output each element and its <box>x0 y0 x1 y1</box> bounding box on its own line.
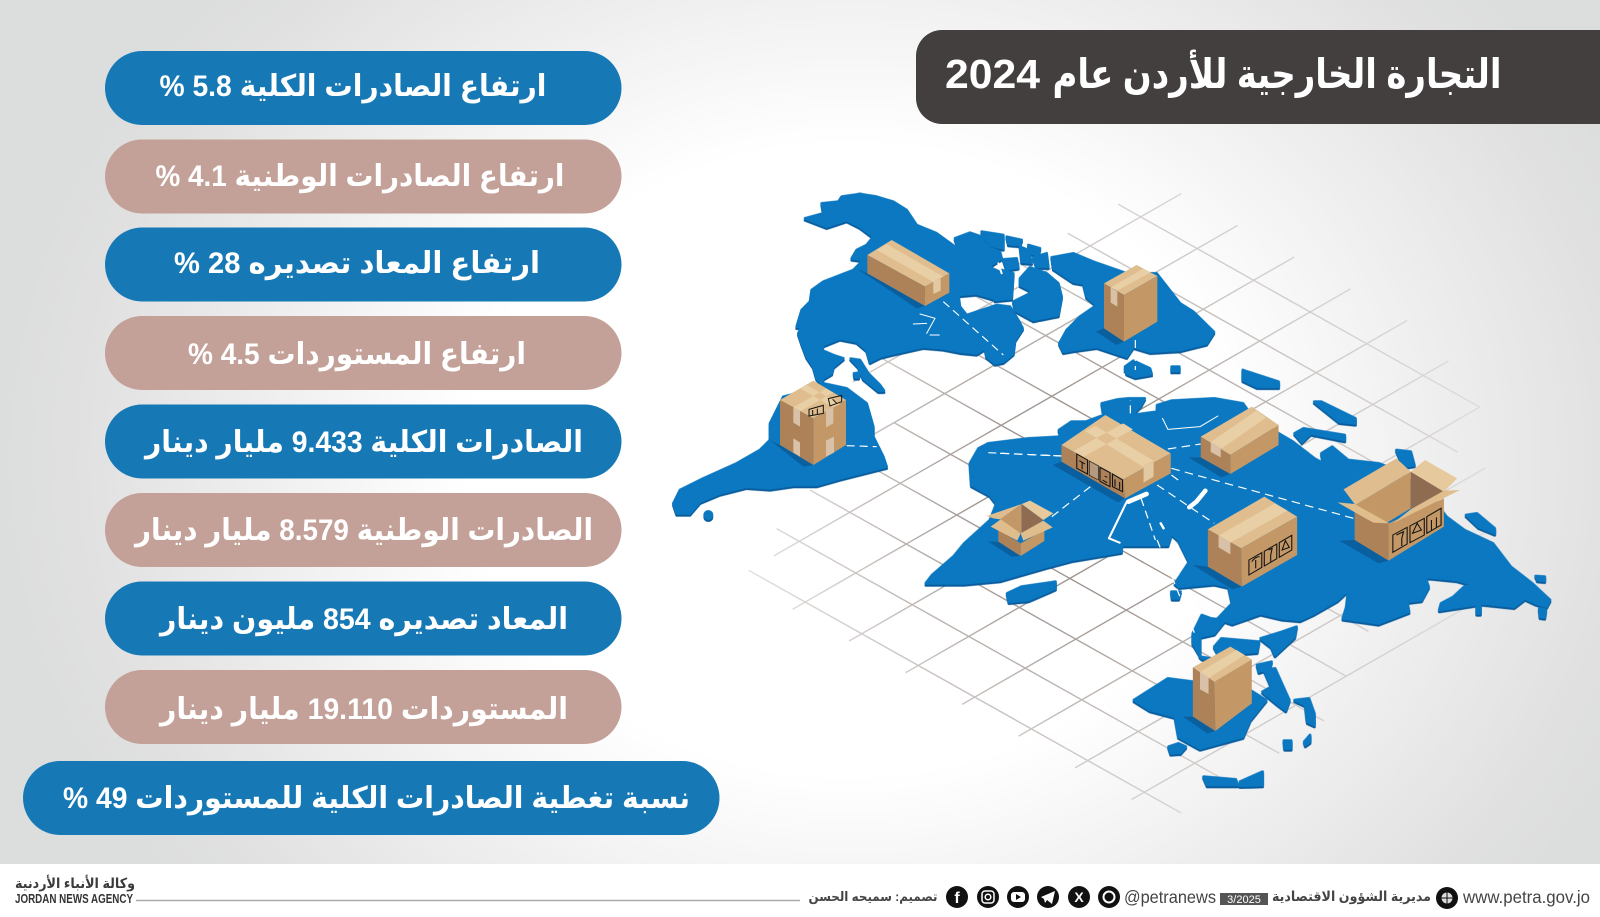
icon: globe <box>1436 887 1458 909</box>
icon: youtube <box>1007 886 1029 908</box>
title banner <box>916 30 1600 124</box>
pill: national exports rise <box>105 140 622 214</box>
pill: re-exports value <box>105 582 622 656</box>
pill: imports rise: ارتفاع المستوردات 4.5 % <box>188 338 526 371</box>
box: open carton east <box>1337 458 1460 563</box>
footer <box>0 864 1600 917</box>
pill: national exports value <box>105 493 622 567</box>
icon: telegram <box>1037 886 1059 908</box>
icon: x <box>1068 886 1090 908</box>
islet <box>705 511 712 519</box>
gulf and sea gaps <box>1109 416 1218 543</box>
pill: re-exports rise <box>105 228 622 302</box>
pill: imports rise <box>105 316 622 390</box>
icon: whatsapp <box>1098 886 1120 908</box>
box: north asia <box>1189 407 1279 477</box>
islands: caribbean <box>851 359 884 391</box>
icon: instagram <box>977 886 999 908</box>
pill: re-exports rise: ارتفاع المعاد تصديره 28 % <box>174 247 540 280</box>
social handle: @petranews <box>1124 887 1216 907</box>
arctic islands <box>955 232 1062 320</box>
map: western continents <box>673 194 1214 519</box>
box: small open carton <box>987 501 1053 557</box>
title banner: 2024 <box>945 51 1040 97</box>
isometric floor grid <box>749 194 1498 813</box>
landmass: northeast continent <box>1052 253 1214 357</box>
pill: imports value: المستوردات 19.110 مليار دينار <box>158 693 568 726</box>
continent: south america <box>673 383 887 513</box>
icon: x: X <box>1074 889 1084 905</box>
box: north america <box>857 240 949 308</box>
agency logo: JORDAN NEWS AGENCY <box>15 892 134 906</box>
box: northeast continent <box>1096 265 1157 345</box>
pill: total exports value <box>105 404 622 478</box>
box: central <box>1053 415 1171 502</box>
islands: southeast asia <box>1193 615 1314 725</box>
pill: coverage ratio: نسبة تغطية الصادرات الكلية للمستوردات 49 % <box>63 782 690 815</box>
islands: eastern seas <box>1007 370 1546 617</box>
pill: coverage ratio <box>23 761 720 835</box>
box: australia <box>1183 647 1252 733</box>
pill: re-exports value: المعاد تصديره 854 مليون دينار <box>158 603 568 636</box>
continent: australia <box>1134 678 1266 748</box>
map: eastern continents <box>926 370 1550 786</box>
date tag <box>1220 893 1268 906</box>
date tag: 3/2025 <box>1227 894 1261 906</box>
agency logo: وكالة الأنباء الأردنية <box>15 875 135 892</box>
continent: eurasia and africa <box>926 398 1550 623</box>
icon: facebook: f <box>954 890 960 907</box>
icon: facebook <box>946 886 968 908</box>
islets: south <box>1169 735 1310 786</box>
dashed shipping routes <box>847 302 1354 633</box>
panel: trade statistics pills <box>23 51 720 835</box>
pill: total exports rise <box>105 51 622 125</box>
footer rule <box>136 900 800 902</box>
box: south america <box>770 381 846 467</box>
world map <box>673 194 1550 786</box>
agency logo <box>15 875 135 906</box>
continent: north america <box>797 194 1023 383</box>
islands: north atlantic <box>1125 361 1179 377</box>
pill: imports value <box>105 670 622 744</box>
cardboard boxes <box>770 240 1460 733</box>
department name: مديرية الشؤون الاقتصادية <box>1272 889 1431 904</box>
title banner: التجارة الخارجية للأردن عام <box>1052 48 1502 99</box>
website: www.petra.gov.jo <box>1462 887 1590 907</box>
box: south asia <box>1193 497 1297 589</box>
pill: total exports value: الصادرات الكلية 9.433 مليار دينار <box>143 426 583 459</box>
pill: national exports rise: ارتفاع الصادرات الوطنية 4.1 % <box>156 160 564 193</box>
pill: total exports rise: ارتفاع الصادرات الكلية 5.8 % <box>160 70 546 103</box>
pill: national exports value: الصادرات الوطنية 8.579 مليار دينار <box>133 514 593 547</box>
designer credit: تصميم: سميحه الحسن <box>808 889 938 904</box>
